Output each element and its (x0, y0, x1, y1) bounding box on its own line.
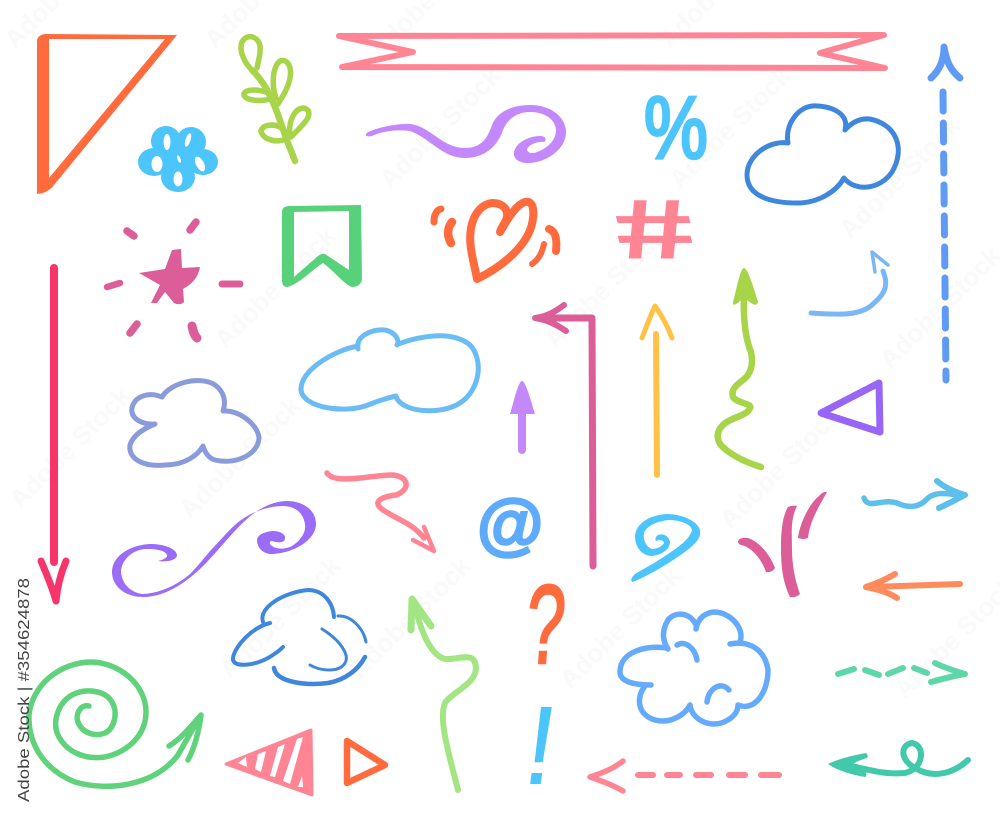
light blue puffy cloud (620, 612, 768, 724)
green spiral arrow (29, 662, 201, 786)
stock image credit text: Adobe Stock | #354624878 (16, 578, 33, 802)
yellow up arrow (642, 306, 672, 475)
purple triangle outline (821, 383, 880, 432)
green dashed arrow right (838, 663, 965, 682)
curved light blue arrow (811, 252, 888, 314)
stock watermark pattern: Adobe Stock (208, 220, 342, 354)
stock watermark pattern: Adobe Stock (713, 400, 847, 534)
orange small triangle outline (347, 741, 385, 783)
icon: blue flower (138, 126, 218, 192)
red arrow down (41, 268, 66, 601)
stock watermark pattern: Adobe Stock (213, 550, 347, 684)
magenta accent marks (738, 492, 827, 597)
purple S swirl (112, 501, 316, 597)
stock watermark pattern: Adobe Stock (373, 60, 507, 194)
periwinkle cloud (130, 381, 259, 465)
exclamation mark: ! (517, 682, 565, 808)
dark blue sketch cloud (233, 590, 366, 684)
green bookmark ribbon (282, 205, 362, 287)
purple up arrow (510, 381, 535, 450)
pink ribbon banner (339, 35, 885, 68)
stock watermark pattern: Adobe Stock (553, 560, 687, 694)
magenta elbow arrow (535, 305, 593, 566)
at symbol: @ (477, 486, 543, 562)
stock watermark pattern: Adobe Stock (173, 390, 307, 524)
magenta star with rays (107, 222, 240, 338)
light green wavy arrow (411, 599, 476, 790)
light blue wide cloud (301, 330, 478, 411)
dashed blue arrow up (931, 47, 960, 380)
orange right triangle outline (37, 34, 177, 194)
orange arrow left (866, 574, 960, 598)
question mark: ? (522, 562, 569, 687)
sky blue wavy arrow (864, 481, 965, 508)
dashed pink arrow left (590, 761, 779, 791)
green wavy arrow (718, 268, 761, 467)
light blue spiral (631, 514, 700, 582)
pink wavy arrow (327, 473, 434, 551)
dark blue cloud (747, 106, 898, 203)
teal looped arrow left (828, 743, 968, 777)
stock watermark pattern: Adobe Stock (343, 550, 477, 684)
stock watermark pattern: Adobe Stock (3, 380, 137, 514)
stock watermark pattern: Adobe Stock (538, 220, 672, 354)
hash symbol: # (602, 183, 706, 276)
icon: green leafy branch (241, 37, 309, 161)
purple curly swash (366, 105, 566, 163)
percent symbol: % (644, 79, 708, 178)
stock watermark pattern: Adobe Stock (663, 60, 797, 194)
stock watermark pattern: Adobe Stock (833, 110, 967, 244)
orange heart with marks (434, 202, 556, 279)
striped pink triangle (226, 730, 312, 795)
